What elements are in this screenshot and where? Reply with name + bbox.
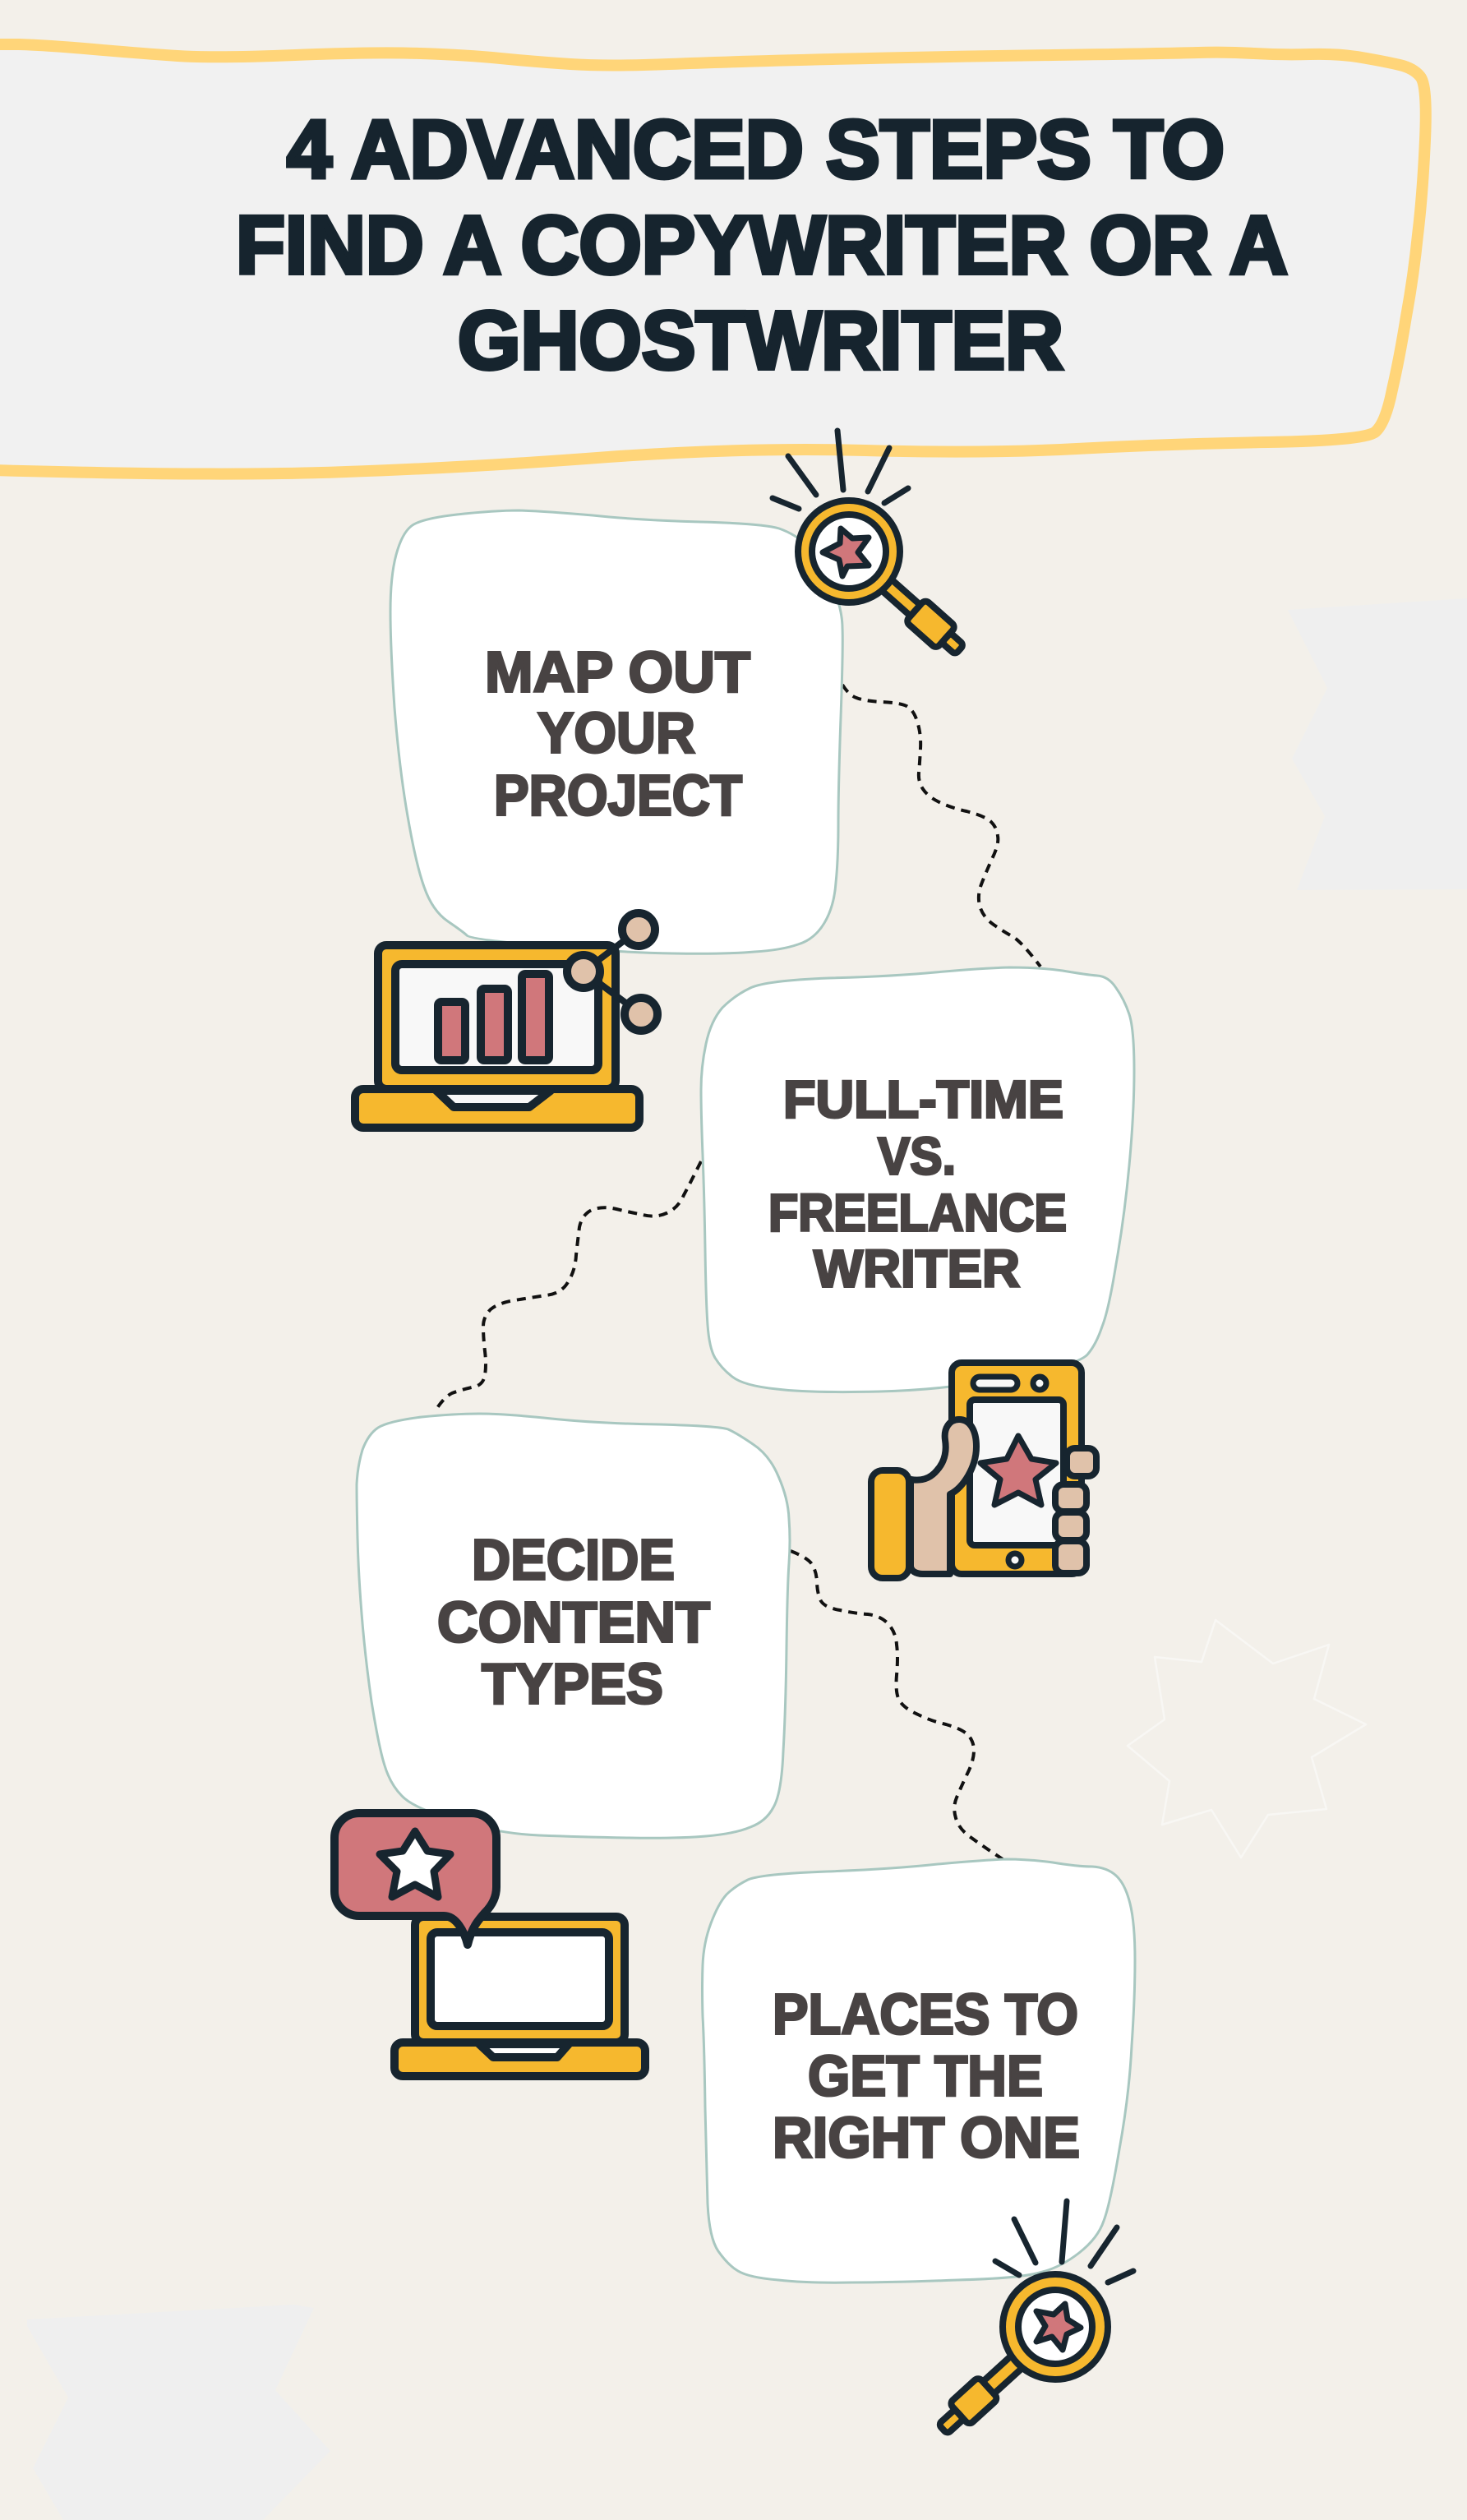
panel: step 4 places to get the right one [702, 1859, 1135, 2282]
step 4 heading [773, 1982, 1080, 2170]
step 2 heading: FULL-TIME [783, 1070, 1063, 1129]
background shape: bottom-left ribbon [27, 2305, 330, 2520]
panel: step 3 decide content types [357, 1414, 790, 1838]
icon: laptop with star speech bubble [334, 1813, 645, 2076]
card shape [357, 1414, 790, 1838]
card shape [701, 967, 1134, 1392]
icon: hand holding phone with star [871, 1363, 1096, 1578]
title banner [0, 44, 1426, 474]
icon: magnifier with star (top) [773, 431, 970, 661]
panel: step 1 map out your project [390, 510, 842, 953]
title text: GHOSTWRITER [458, 294, 1063, 386]
title text: 4 ADVANCED STEPS TO [287, 104, 1225, 196]
title text: FIND A COPYWRITER OR A [236, 199, 1288, 291]
step 2 heading: VS. [878, 1126, 956, 1185]
icon: magnifier with star (bottom) [933, 2201, 1133, 2440]
step 1 heading [485, 639, 750, 827]
background shape: outlined star [1128, 1620, 1366, 1858]
step 1 heading: PROJECT [494, 763, 742, 827]
step 1 heading: MAP OUT [485, 639, 750, 704]
step 4 heading: PLACES TO [773, 1982, 1078, 2047]
card shape [702, 1859, 1135, 2282]
panel: step 2 full-time vs freelance writer [701, 967, 1134, 1392]
card shape [390, 510, 842, 953]
step 2 heading: WRITER [814, 1239, 1020, 1299]
step 1 heading: YOUR [537, 700, 695, 764]
dashed connector: step 3 to step 4 [791, 1551, 1003, 1859]
dashed connector: step 1 to step 2 [842, 685, 1040, 967]
background shape: right ribbon [1288, 598, 1467, 890]
step 4 heading: GET THE [808, 2043, 1043, 2107]
step 4 heading: RIGHT ONE [773, 2106, 1080, 2170]
dashed connector: step 2 to step 3 [436, 1161, 701, 1410]
banner outline [0, 44, 1426, 474]
step 3 heading: CONTENT [437, 1590, 710, 1654]
title text [236, 104, 1288, 386]
step 3 heading [437, 1527, 710, 1716]
icon: laptop with bar chart and share nodes [355, 913, 657, 1128]
step 2 heading [768, 1070, 1067, 1299]
step 2 heading: FREELANCE [768, 1184, 1067, 1243]
step 3 heading: TYPES [482, 1652, 663, 1716]
step 3 heading: DECIDE [472, 1527, 675, 1591]
